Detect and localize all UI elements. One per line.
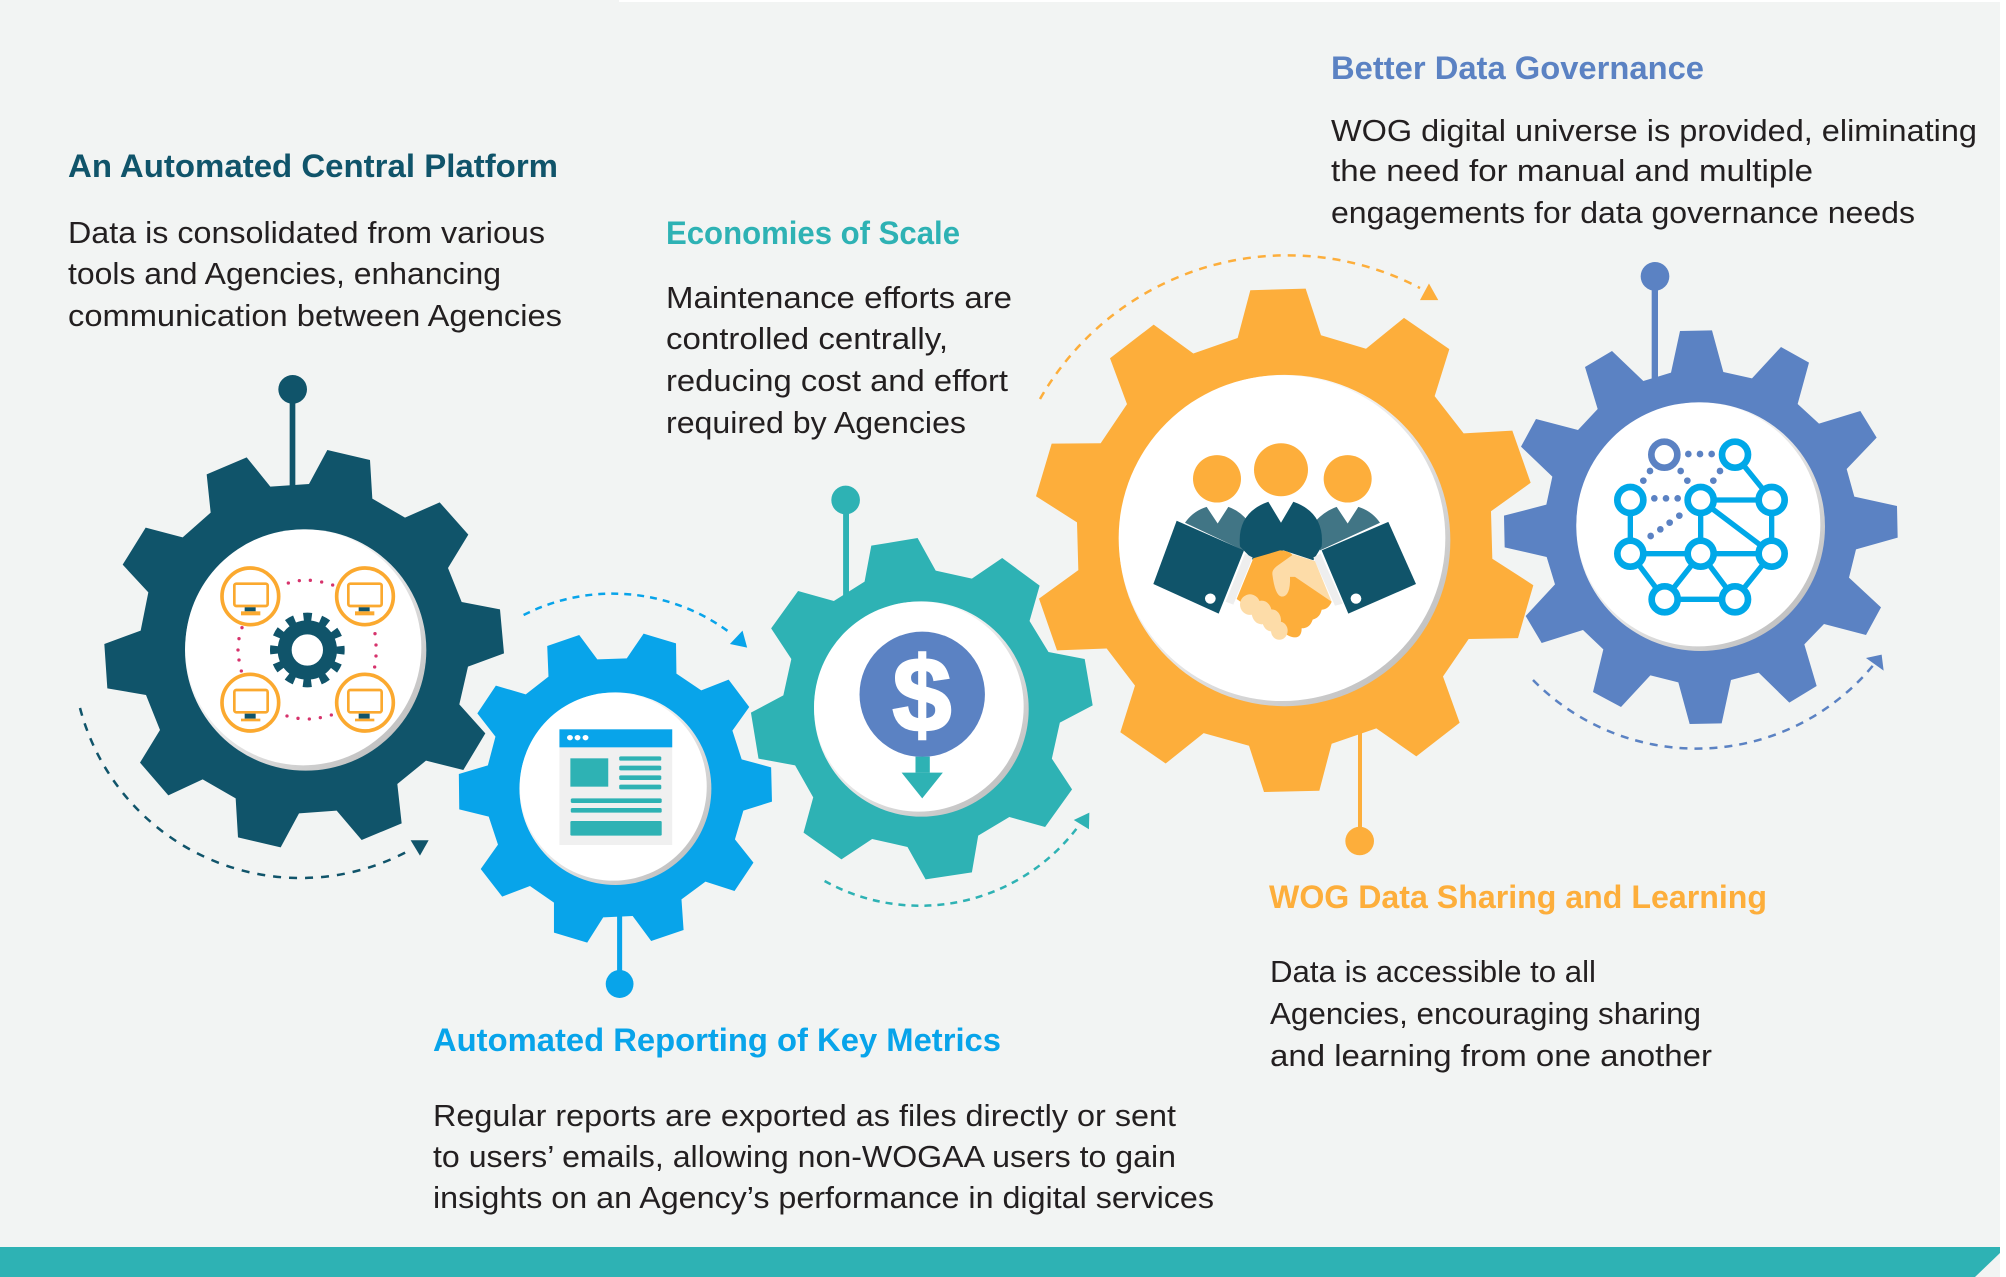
arrow: slate curved dashed (1533, 655, 1884, 749)
orange hand (1237, 550, 1332, 637)
gear 5: data governance (1504, 262, 1898, 724)
connector stem and pin (1641, 262, 1669, 382)
dotted links (236, 579, 378, 721)
gear body (459, 634, 772, 943)
network nodes (1617, 442, 1785, 612)
gear hub (1119, 375, 1450, 706)
icon: connected computers (222, 568, 393, 731)
gear 2: automated reporting (459, 634, 772, 998)
icon: report document (559, 729, 672, 845)
body text: Regular reports are exported as files directly or sent (433, 1098, 1176, 1133)
gear hub (519, 692, 711, 885)
network links (1630, 455, 1772, 599)
body text: engagements for data governance needs (1331, 195, 1915, 230)
gear 1: central platform (104, 375, 504, 847)
light hand (1240, 554, 1332, 640)
arrow: orange curved dashed (1040, 255, 1438, 399)
body text: reducing cost and effort (666, 363, 1008, 398)
icon: dollar coin disc (860, 632, 985, 757)
icon: computer bottom right (337, 674, 393, 731)
body text: insights on an Agency’s performance in digital services (433, 1180, 1214, 1215)
body text: required by Agencies (666, 405, 966, 440)
heading block: Automated Reporting of Key Metrics (433, 1022, 1214, 1215)
gear body (751, 538, 1093, 879)
heading block: An Automated Central Platform (68, 148, 562, 333)
body text: tools and Agencies, enhancing (68, 256, 501, 291)
cuffs (1226, 554, 1343, 606)
gear hub (814, 601, 1029, 817)
body text: Agencies, encouraging sharing (1270, 996, 1701, 1031)
body text: Data is consolidated from various (68, 215, 545, 250)
body text: the need for manual and multiple (1331, 153, 1813, 188)
body text (1331, 113, 1977, 230)
body text: Data is accessible to all (1270, 954, 1596, 989)
gear body (1504, 330, 1898, 724)
cuff buttons (1205, 593, 1361, 604)
icon: dollar sign: $ (893, 636, 951, 754)
gear 3: economies of scale (751, 486, 1093, 879)
gear hub (1576, 402, 1825, 651)
heading: An Automated Central Platform (68, 148, 558, 184)
icon: computer bottom left (222, 674, 279, 731)
heading: Economies of Scale (666, 215, 960, 251)
body text: Maintenance efforts are (666, 280, 1012, 315)
connector stem and pin (606, 915, 634, 998)
body text: communication between Agencies (68, 298, 562, 333)
body text (666, 280, 1012, 440)
icon: computer top right (337, 568, 393, 625)
heads (1193, 443, 1372, 503)
gear hub (185, 529, 426, 771)
body text (68, 215, 562, 333)
body text: and learning from one another (1270, 1038, 1712, 1073)
arrow: blue curved dashed (524, 594, 747, 648)
body text: to users’ emails, allowing non-WOGAA users to gain (433, 1139, 1176, 1174)
heading block: Economies of Scale (666, 215, 1012, 440)
body text: controlled centrally, (666, 321, 948, 356)
body text: WOG digital universe is provided, eliminating (1331, 113, 1977, 148)
dotted links (1640, 451, 1723, 539)
icon: data network (1617, 442, 1785, 612)
connector stem and pin (278, 375, 307, 488)
arrow: dark curved dashed (80, 708, 429, 878)
heading: WOG Data Sharing and Learning (1269, 879, 1767, 915)
center body (1240, 502, 1322, 560)
icon: handshake with people (1153, 443, 1416, 640)
heading block: Better Data Governance (1331, 50, 1977, 230)
bottom teal bar (0, 1247, 2000, 1277)
heading block: WOG Data Sharing and Learning (1269, 879, 1767, 1073)
gear 4: data sharing (1036, 289, 1533, 855)
icon: down arrow (902, 757, 943, 798)
icon: computer top left (222, 568, 279, 625)
heading: Automated Reporting of Key Metrics (433, 1022, 1001, 1058)
heading: Better Data Governance (1331, 50, 1704, 86)
body text (1270, 954, 1712, 1073)
body text (433, 1098, 1214, 1215)
connector stem and pin (1345, 728, 1374, 855)
gear body (1036, 289, 1533, 792)
arrow: teal curved dashed (825, 813, 1089, 906)
faded node (1651, 442, 1677, 468)
icon: small cog (274, 617, 341, 683)
side bodies (1185, 507, 1380, 550)
sleeves (1153, 521, 1416, 614)
gear body (104, 450, 504, 847)
connector stem and pin (831, 486, 860, 600)
